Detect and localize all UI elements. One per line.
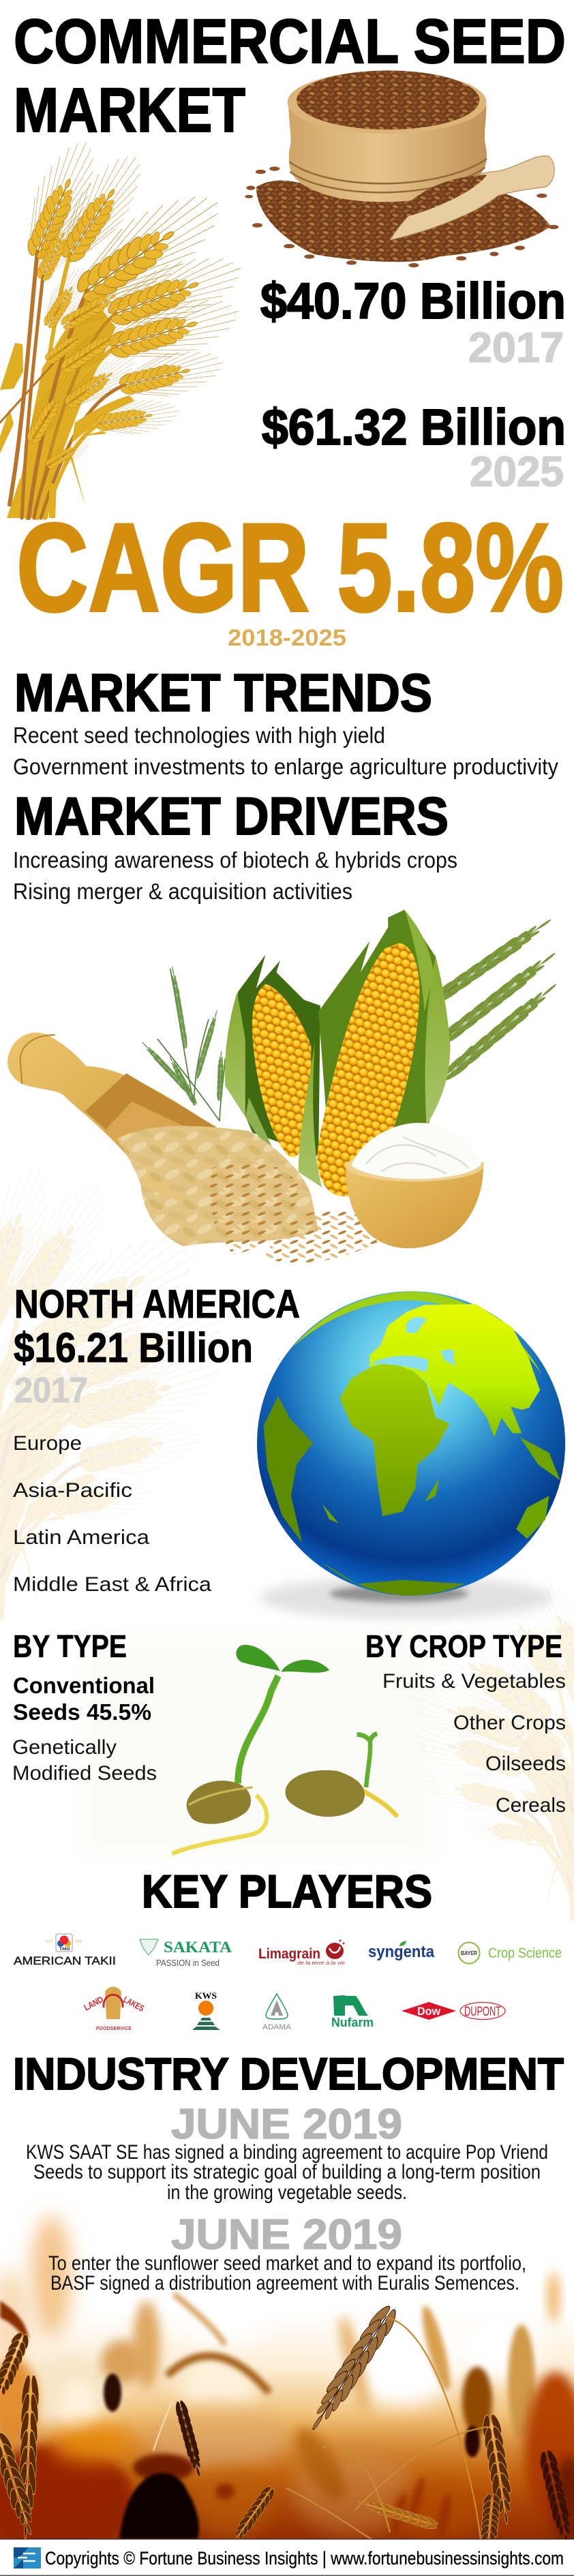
green grass sprig: [140, 966, 225, 1121]
africa: [339, 1362, 449, 1516]
wheat field photo: [0, 2215, 574, 2553]
logo: american takii: TAKII: [59, 1948, 70, 1952]
region list: [13, 1432, 211, 1596]
logo: bayer crop science: Crop Science: [488, 1945, 562, 1961]
seed pile: [256, 181, 551, 262]
market size 2017: $40.70 Billion: [260, 273, 566, 329]
logo: kws: KWS: [195, 1990, 217, 2001]
logo: bayer crop science: [458, 1943, 562, 1963]
logo: nufarm: Nufarm: [331, 2016, 374, 2029]
faded wheat right: [402, 1573, 574, 1921]
north america: [14, 1282, 300, 1410]
logo: land o lakes: FOODSERVICE: [96, 2027, 132, 2031]
icon: golden wheat bundle: [0, 132, 250, 518]
right field tones: [287, 2271, 574, 2553]
logo: kws: [192, 1990, 220, 2030]
logo: american takii: [14, 1934, 116, 1967]
by type: Seeds 45.5%: [13, 1699, 151, 1725]
north america: $16.21 Billion: [14, 1324, 253, 1371]
by crop type: Fruits & Vegetables: [382, 1670, 566, 1693]
wooden scoop: [7, 1033, 220, 1203]
logo: limagrain: Limagrain: [258, 1946, 320, 1962]
logo: sakata: PASSION in Seed: [156, 1958, 220, 1968]
by crop type: [365, 1628, 566, 1817]
logo: nufarm: [331, 1995, 374, 2029]
back husks: [229, 955, 320, 1156]
market drivers: [13, 786, 457, 904]
market trends: MARKET TRENDS: [14, 663, 432, 723]
logo: adama: ADAMA: [262, 2023, 292, 2031]
green wheat ears: [427, 913, 560, 1087]
market drivers: MARKET DRIVERS: [14, 786, 449, 846]
icon: fortune business insights logo: [14, 2547, 41, 2569]
field base gradient: [0, 2311, 574, 2539]
region list: Europe: [13, 1432, 82, 1455]
by type: Genetically: [12, 1736, 117, 1759]
logo: american takii: AMERICAN TAKII: [14, 1954, 116, 1967]
market trends: [13, 663, 558, 779]
title: MARKET: [14, 76, 245, 145]
title: [14, 7, 566, 145]
region list: Asia-Pacific: [13, 1479, 132, 1502]
northern rim land: [293, 1292, 542, 1374]
development: basf: JUNE 2019: [171, 2211, 402, 2258]
development: basf: [48, 2211, 526, 2294]
by type: BY TYPE: [13, 1628, 127, 1664]
oceania and islands: [322, 1437, 560, 1539]
icon: sprouting seeds: [172, 1645, 397, 1854]
logo: american takii: EST: [46, 1940, 53, 1944]
logo: limagrain: de la terre à la vie: [297, 1960, 345, 1966]
market size 2017: 2017: [468, 324, 564, 372]
logo: land o lakes: LAND: [82, 1994, 105, 2013]
logo: dow: [402, 2002, 456, 2020]
logo: adama: [262, 1994, 292, 2031]
market size 2025: 2025: [470, 449, 564, 496]
logo: dupont: DUPONT: [464, 2005, 501, 2019]
faded wheat left: [0, 1157, 234, 1620]
logo: american takii: 1835: [74, 1940, 82, 1944]
development: kws: JUNE 2019: [171, 2101, 402, 2148]
north america: NORTH AMERICA: [14, 1282, 300, 1327]
globe sphere: [257, 1291, 565, 1596]
small sprout: [357, 1733, 377, 1787]
icon: bowl of flax seeds: [245, 70, 558, 267]
soft backdrop behind sprouts: [82, 1636, 436, 1854]
logo: land o lakes: [82, 1986, 146, 2031]
eurasia: [369, 1304, 540, 1437]
icon: globe: [257, 1291, 565, 1619]
region list: Latin America: [13, 1526, 149, 1549]
logo: syngenta: syngenta: [368, 1943, 435, 1961]
by crop type: Cereals: [496, 1794, 566, 1817]
region list: Middle East & Africa: [13, 1573, 211, 1596]
mediterranean and caspian: [369, 1317, 455, 1373]
by crop type: Other Crops: [453, 1712, 566, 1734]
bowl body: [288, 104, 487, 202]
logo: dupont: [460, 2003, 505, 2019]
development: kws: in the growing vegetable seeds.: [167, 2181, 407, 2204]
corn cob right: [318, 943, 419, 1196]
CAGR: 2018-2025: [228, 625, 346, 651]
globe shadow: [260, 1576, 553, 1619]
rice bowl: [346, 1162, 483, 1248]
wooden scoop: [390, 156, 554, 240]
logo: land o lakes: LAKES: [122, 1994, 146, 2014]
market drivers: Rising merger & acquisition activities: [13, 879, 352, 904]
wheat stalks: [153, 2318, 488, 2539]
crops illustration: [7, 910, 560, 1262]
logo: sakata: SAKATA: [164, 1939, 232, 1956]
sharp wheat ears: [0, 2299, 574, 2553]
logo: dow: Dow: [417, 2005, 441, 2018]
development: kws: [26, 2101, 548, 2204]
by type: [12, 1628, 157, 1785]
antarctica: [322, 1562, 465, 1596]
bottom darkening: [0, 2413, 574, 2539]
market size 2025: [262, 399, 566, 496]
chaff pile: [117, 1126, 318, 1246]
by type: Conventional: [13, 1673, 155, 1698]
market drivers: Increasing awareness of biotech & hybrids crops: [13, 847, 457, 873]
scattered seeds: [245, 166, 558, 267]
by crop type: Oilseeds: [485, 1753, 566, 1775]
logo: bayer crop science: BAYER: [461, 1950, 477, 1956]
market trends: Recent seed technologies with high yield: [13, 723, 385, 748]
key players heading: KEY PLAYERS: [142, 1866, 432, 1918]
south america: [264, 1396, 313, 1543]
left field tones: [0, 2215, 286, 2553]
seeds in bowl: [297, 70, 479, 130]
north america: 2017: [14, 1371, 88, 1410]
black shadow mass: [119, 2454, 199, 2539]
front husks: [225, 992, 245, 1117]
market size 2017: [260, 273, 566, 372]
large sprout: [238, 1676, 278, 1783]
oats pile: [210, 1162, 300, 1254]
logo: sakata: [140, 1939, 232, 1968]
footer: [0, 2539, 574, 2576]
logo: limagrain: [258, 1940, 345, 1966]
corn cob left: [252, 984, 311, 1157]
by type: Modified Seeds: [12, 1762, 157, 1785]
